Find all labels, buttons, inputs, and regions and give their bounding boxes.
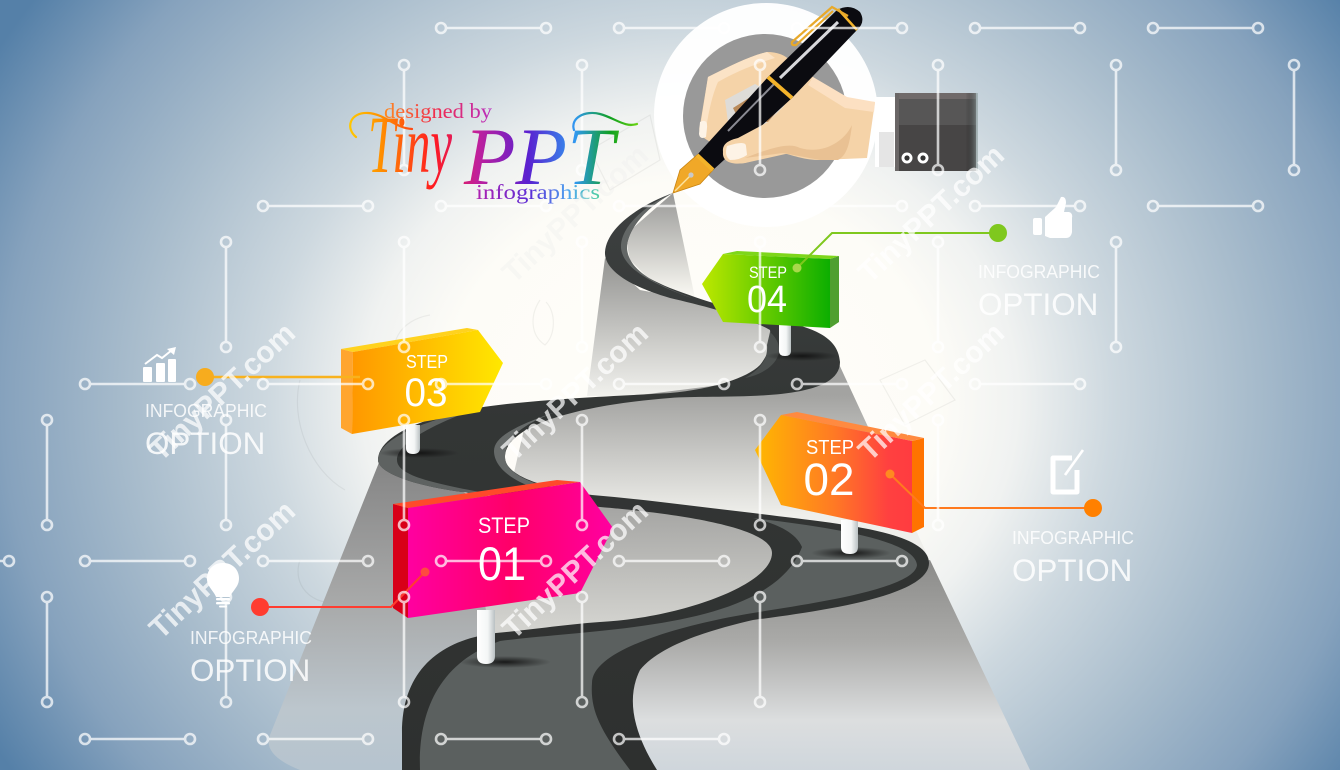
option label: INFOGRAPHIC — [978, 262, 1100, 282]
road: lighter edge at left bend — [378, 411, 505, 497]
sign 02 — [755, 412, 924, 533]
jacket sleeve — [895, 93, 978, 171]
icon: light bulb — [207, 563, 239, 608]
option heading: OPTION — [978, 287, 1098, 322]
logo flourishes — [350, 113, 637, 137]
watermarks: TinyPPT.com — [852, 139, 1011, 290]
pen clip — [792, 7, 848, 45]
sign 04 — [702, 251, 839, 328]
road: lighter lower lane — [420, 518, 917, 770]
pen — [673, 7, 862, 193]
option heading: OPTION — [190, 653, 310, 688]
logo: designed by TinyPPT infographics — [350, 99, 637, 204]
option: left upper — [143, 347, 267, 461]
outer white circle — [654, 3, 878, 227]
icon: tablet and pen — [1053, 450, 1083, 492]
connector: sign 03 to option — [196, 368, 360, 386]
cone: left lower region — [269, 460, 560, 770]
cone: right lower region — [600, 560, 1030, 770]
cone: upper grey wedge — [587, 258, 780, 396]
faint sketch doodles — [297, 115, 955, 722]
road: dark base — [378, 193, 929, 770]
logo wordmark: PPT: PPT — [463, 111, 620, 202]
watermarks: TinyPPT.com — [496, 317, 655, 468]
step 04 label: STEP — [749, 263, 787, 282]
logo caption: designed by: designed by — [384, 99, 493, 123]
connector: sign 02 to option — [886, 470, 1102, 517]
icon: thumbs up — [1033, 197, 1072, 238]
step 02 number: 02 — [804, 454, 854, 505]
watermarks — [143, 139, 1011, 646]
connector: sign 01 to option — [251, 568, 430, 616]
road: lighter edge at top bend — [621, 193, 700, 301]
option label: INFOGRAPHIC — [1012, 528, 1134, 548]
cone: inner oval region — [470, 495, 790, 640]
hand — [699, 52, 875, 163]
step 02 label: STEP — [806, 436, 854, 459]
watermarks: TinyPPT.com — [852, 317, 1011, 468]
watermarks: TinyPPT.com — [143, 317, 302, 468]
sign 04 post — [766, 322, 838, 361]
step 04 number: 04 — [747, 279, 787, 321]
option heading: OPTION — [145, 426, 265, 461]
step 03 number: 03 — [404, 371, 448, 415]
cone: upper light wedge — [625, 193, 695, 298]
watermarks: TinyPPT.com — [496, 139, 655, 290]
grey circle — [683, 34, 847, 198]
road: lighter edge inner bend — [494, 409, 565, 488]
sign 03 post — [379, 425, 459, 458]
sign 01 post — [459, 610, 551, 668]
logo wordmark: Tiny: Tiny — [368, 99, 452, 190]
hand with pen illustration — [654, 3, 978, 227]
pen barrel — [697, 7, 862, 170]
logo caption: infographics: infographics — [476, 180, 600, 204]
thumb over pen — [723, 100, 852, 164]
shirt cuff — [875, 97, 895, 167]
step 01 label: STEP — [478, 513, 530, 538]
cone: middle region — [510, 362, 932, 565]
option: top right — [978, 197, 1100, 322]
connector: sign 04 to option — [792, 224, 1007, 272]
sign 02 post — [811, 520, 891, 559]
sign 03 — [341, 328, 503, 434]
winding road — [378, 193, 929, 770]
option: right — [1012, 450, 1134, 588]
option: left lower — [190, 563, 312, 688]
step 03 label: STEP — [406, 352, 448, 372]
option label: INFOGRAPHIC — [190, 628, 312, 648]
road: lighter edge at right bend — [745, 332, 779, 378]
sign 01 — [393, 480, 613, 618]
watermarks: TinyPPT.com — [143, 495, 302, 646]
step 01 number: 01 — [478, 537, 526, 590]
icon: growth chart — [143, 347, 176, 382]
pen nib — [673, 155, 713, 193]
road landscape cone — [269, 193, 1030, 770]
option label: INFOGRAPHIC — [145, 401, 267, 421]
option heading: OPTION — [1012, 553, 1132, 588]
watermarks: TinyPPT.com — [496, 495, 655, 646]
